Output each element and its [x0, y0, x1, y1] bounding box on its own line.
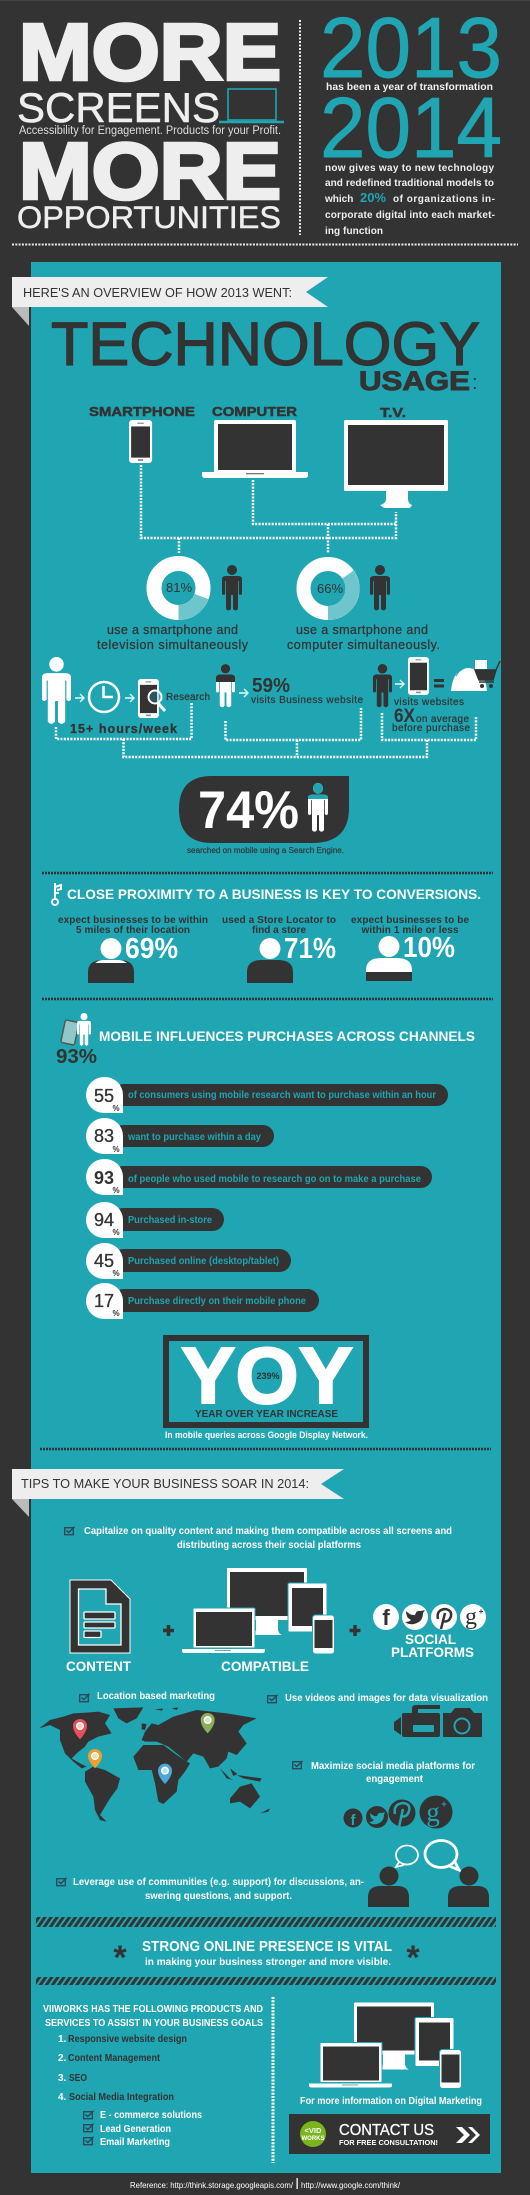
stat bar: 55% — [86, 1077, 448, 1113]
ribbon: tips heading: TIPS TO MAKE YOUR BUSINESS SOAR IN 2014: — [21, 1476, 309, 1491]
callout: YOY box: YOY — [181, 1331, 353, 1420]
heading: mobile influences: 93% — [56, 1046, 97, 1068]
icon: video camera — [394, 1705, 440, 1737]
services list: 3. — [58, 2073, 67, 2084]
stat bar: 94%: 94 — [94, 1210, 114, 1230]
icon: plus — [350, 1625, 360, 1636]
callout: YOY box — [165, 1331, 368, 1440]
services list: Social Media Integration — [69, 2092, 174, 2103]
stat bar: 55%: 55 — [94, 1086, 114, 1106]
services list: SERVICES TO ASSIST IN YOUR BUSINESS GOALS — [45, 2018, 263, 2029]
stat: 71% — [222, 915, 336, 983]
callout: 74% search: 74% — [198, 781, 299, 840]
header: years and intro: ing function — [325, 226, 383, 237]
stat bar: 94%: Purchased in-store — [128, 1215, 212, 1226]
stat bar: 93%: of people who used mobile to research go on to make a purchase — [128, 1174, 421, 1185]
callout: strong online presence: * — [113, 1939, 127, 1977]
header: years and intro: and redefined traditional models to — [325, 178, 494, 189]
stat bar: 17%: Purchase directly on their mobile phone — [128, 1296, 306, 1307]
stat: 71%: 71% — [284, 933, 336, 965]
ribbon: tips heading — [12, 1469, 344, 1517]
stat bar: 94% — [86, 1202, 224, 1238]
services list: Content Management — [68, 2053, 161, 2064]
icon: social platforms — [373, 1604, 486, 1660]
header title: MORE — [19, 126, 281, 216]
stat bar: 55%: of consumers using mobile research want to purchase within an hour — [128, 1090, 436, 1101]
stat bar: 17%: 17 — [94, 1291, 114, 1311]
icons: dark social circles — [344, 1796, 452, 1829]
stat: 71%: find a store — [252, 925, 306, 936]
flow: 15+ hours per week research — [42, 657, 210, 736]
icon: social platforms: f — [382, 1605, 390, 1630]
stripe band — [36, 1977, 496, 1985]
device: TV — [344, 405, 448, 508]
flow: 15+ hours per week research: Research — [166, 692, 210, 703]
icon: responsive devices — [309, 2002, 462, 2088]
callout: YOY box: In mobile queries across Google Display Network. — [165, 1430, 368, 1440]
icon: compatible devices: COMPATIBLE — [221, 1658, 309, 1674]
stat bar: 45%: Purchased online (desktop/tablet) — [128, 1256, 279, 1267]
tip: social engagement: Maximize social media platforms for — [311, 1761, 475, 1772]
header title: OPPORTUNITIES — [17, 199, 281, 235]
world map with pins — [39, 1707, 270, 1822]
stat bar: 93%: 93 — [94, 1168, 114, 1188]
stat bar: 45% — [86, 1243, 291, 1279]
stat bar: 55%: % — [112, 1104, 120, 1113]
flow: visits websites 6x before purchase: before purchase — [392, 723, 470, 734]
tip: leverage communities: swering questions, and support. — [145, 1891, 292, 1902]
tip: social engagement — [293, 1761, 475, 1785]
services list: E - commerce solutions — [100, 2110, 202, 2121]
stat: 10%: expect businesses to be — [351, 915, 469, 926]
tip: quality content: Capitalize on quality content and making them compatible across all screens and — [84, 1526, 452, 1537]
header: years and intro: corporate digital into each market- — [325, 210, 495, 221]
text: smartphone and computer: computer simultaneously. — [287, 638, 440, 652]
header: years and intro: now gives way to new technology — [325, 163, 494, 174]
teal main panel — [31, 262, 501, 2173]
stat: 10% — [351, 915, 469, 981]
header: years and intro: 20% — [360, 190, 386, 205]
heading: close proximity: CLOSE PROXIMITY TO A BUSINESS IS KEY TO CONVERSIONS. — [67, 886, 481, 902]
flow: visits websites 6x before purchase: on average — [416, 714, 469, 725]
map pin: red — [73, 1719, 87, 1739]
stat bar: 17% — [86, 1283, 319, 1319]
header title: SCREENS — [17, 84, 220, 131]
ribbon: overview heading — [12, 277, 328, 326]
services list — [43, 2004, 263, 2148]
header title — [17, 8, 284, 235]
flow: visits websites 6x before purchase: visits websites — [394, 697, 464, 708]
donut: 81%: 81% — [166, 580, 192, 595]
icon: compatible devices — [182, 1568, 334, 1674]
tip: location based marketing: Location based marketing — [97, 1691, 215, 1702]
icon: content document: CONTENT — [66, 1658, 131, 1674]
stat bar: 93% — [86, 1159, 432, 1195]
device: computer — [202, 404, 308, 478]
tip: videos and images: Use videos and images for data visualization — [285, 1693, 488, 1704]
icon: social platforms: + — [479, 1607, 484, 1616]
callout: strong online presence: * — [406, 1939, 420, 1977]
stat: 69% — [58, 915, 208, 983]
services list: SEO — [69, 2073, 87, 2084]
services list: Responsive website design — [68, 2034, 187, 2045]
stat: 10%: 10% — [403, 932, 455, 964]
text: smartphone and television: television simultaneously — [97, 638, 249, 652]
stat bar: 83%: want to purchase within a day — [127, 1132, 261, 1143]
heading: mobile influences — [56, 1013, 475, 1068]
call to action: contact us: FOR FREE CONSULTATION! — [339, 2140, 438, 2147]
footer references: http://www.google.com/think/ — [301, 2180, 401, 2190]
heading: mobile influences: MOBILE INFLUENCES PURCHASES ACROSS CHANNELS — [99, 1028, 475, 1044]
person icon — [222, 565, 242, 610]
stat bar: 83%: % — [112, 1145, 120, 1154]
map pin: orange — [88, 1749, 102, 1768]
flow: 15+ hours per week research: 15+ hours/week — [70, 722, 177, 736]
stat bar: 17%: % — [112, 1309, 120, 1318]
header: years and intro: of organizations in- — [393, 194, 495, 205]
services list: 1. — [58, 2034, 67, 2045]
header: years and intro: 2013 — [320, 1, 502, 96]
callout: 74% search: searched on mobile using a Search Engine. — [187, 845, 344, 855]
stat bar: 83% — [86, 1118, 274, 1154]
services list: 2. — [58, 2053, 67, 2064]
icons: dark social circles: g — [426, 1797, 440, 1827]
map pin: green — [201, 1713, 215, 1733]
flow: 59% visits business website: 59% — [252, 674, 290, 697]
stat bar: 45%: % — [112, 1269, 120, 1278]
stat: 69%: 5 miles of their location — [76, 925, 190, 936]
header: years and intro: has been a year of transformation — [326, 82, 493, 93]
icon: plus — [163, 1625, 174, 1636]
stat: 10%: within 1 mile or less — [360, 925, 459, 936]
heading: technology usage: : — [472, 372, 478, 394]
call to action: contact us: <VID — [305, 2126, 322, 2135]
services list: Email Marketing — [100, 2137, 170, 2148]
device: smartphone — [89, 404, 195, 463]
connectors: flow brackets — [56, 703, 476, 757]
header: years and intro: 2014 — [320, 81, 502, 176]
services list: Lead Generation — [100, 2124, 171, 2135]
donut: 66% — [304, 564, 352, 613]
icon: social platforms: PLATFORMS — [391, 1644, 474, 1660]
callout: strong online presence — [113, 1938, 420, 1977]
stat bar: 83%: 83 — [94, 1126, 114, 1146]
device: TV: T.V. — [380, 405, 406, 420]
callout: YOY box: 239% — [256, 1371, 280, 1381]
icon: laptop outline — [219, 89, 284, 122]
text: smartphone and television: use a smartphone and — [107, 623, 238, 637]
stat bar: 45%: 45 — [94, 1251, 114, 1271]
ribbon: overview heading: HERE'S AN OVERVIEW OF HOW 2013 WENT: — [23, 285, 292, 300]
header title: MORE — [19, 8, 281, 96]
flow: visits websites 6x before purchase: 6X — [394, 706, 415, 727]
connectors: devices to donuts — [141, 465, 396, 553]
heading: technology usage: USAGE — [359, 366, 470, 396]
text: smartphone and computer: use a smartphone and — [296, 623, 428, 637]
footer references: Reference: http://think.storage.googleapis.com/ — [130, 2180, 294, 2190]
person icon — [370, 565, 390, 610]
callout: 74% search — [179, 776, 349, 855]
header title: Accessibility for Engagement. Products for your Profit. — [19, 125, 281, 137]
tip: leverage communities — [57, 1877, 364, 1902]
text: smartphone and computer — [287, 623, 440, 652]
stripe band — [36, 1917, 496, 1927]
header: years and intro: which — [324, 194, 353, 205]
call to action: contact us: CONTACT US — [339, 2122, 434, 2139]
callout: strong online presence: STRONG ONLINE PRESENCE IS VITAL — [142, 1938, 392, 1955]
stat: 69%: expect businesses to be within — [58, 915, 208, 926]
call to action: contact us: For more information on Digital Marketing — [300, 2096, 482, 2107]
call to action: contact us: WORKS — [302, 2136, 324, 2142]
callout: YOY box: YEAR OVER YEAR INCREASE — [195, 1409, 338, 1420]
stat: 69%: 69% — [125, 933, 178, 965]
heading: close proximity — [52, 883, 481, 905]
device: computer: COMPUTER — [212, 404, 298, 419]
device: smartphone: SMARTPHONE — [89, 404, 195, 419]
icon: content document — [66, 1580, 131, 1674]
icon: social platforms: SOCIAL — [405, 1631, 456, 1647]
flow: 59% visits business website — [216, 664, 363, 707]
tip: quality content: distributing across their social platforms — [177, 1540, 361, 1551]
footer references — [130, 2178, 401, 2190]
services list: 4. — [58, 2092, 67, 2103]
flow: 59% visits business website: visits Business website — [251, 695, 363, 706]
icon: people talking — [368, 1840, 489, 1907]
tip: social engagement: engagement — [366, 1774, 424, 1785]
header: years and intro — [320, 1, 502, 237]
map pin: blue — [158, 1764, 172, 1784]
text: smartphone and television — [97, 623, 249, 652]
services list: VIIWORKS HAS THE FOLLOWING PRODUCTS AND — [43, 2004, 263, 2015]
tip: leverage communities: Leverage use of communities (e.g. support) for discussions, an- — [73, 1877, 364, 1888]
icon: photo camera — [443, 1708, 482, 1737]
tip: quality content — [65, 1526, 452, 1551]
stat: 71%: used a Store Locator to — [222, 915, 336, 926]
donut: 66%: 66% — [317, 581, 343, 596]
icon: social platforms: g — [465, 1604, 477, 1630]
call to action: contact us — [289, 2096, 490, 2154]
icons: dark social circles: f — [350, 1812, 356, 1829]
donut: 81% — [154, 564, 203, 613]
stat bar: 94%: % — [112, 1228, 120, 1237]
flow: visits websites 6x before purchase — [373, 657, 500, 734]
stat bar: 93%: % — [112, 1186, 120, 1195]
heading: technology usage: TECHNOLOGY — [51, 310, 480, 378]
icons: dark social circles: + — [441, 1799, 447, 1809]
callout: strong online presence: in making your business stronger and more visible. — [145, 1956, 391, 1968]
